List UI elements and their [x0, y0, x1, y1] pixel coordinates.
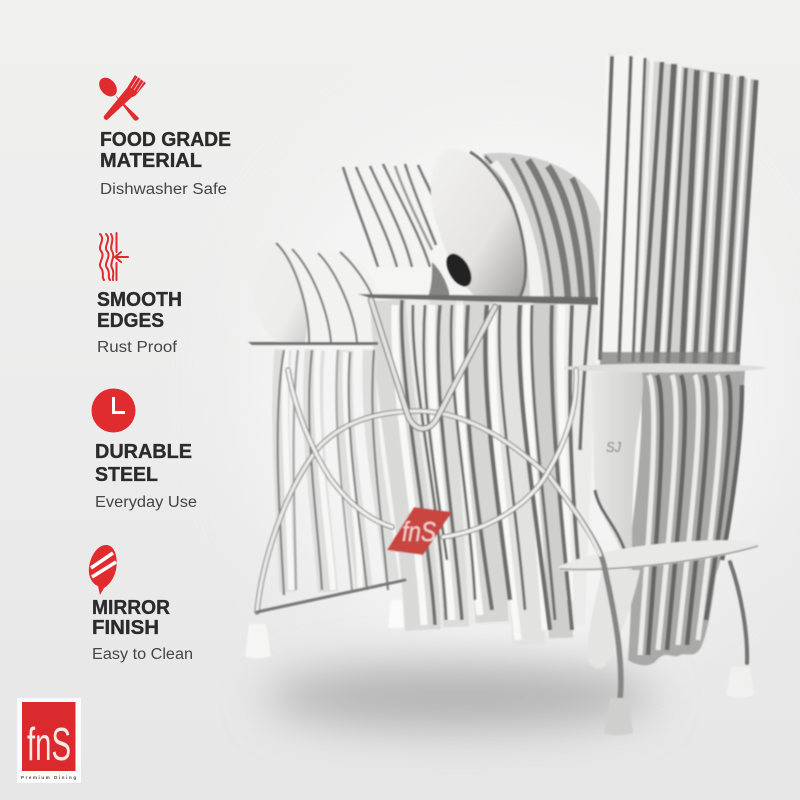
- wire frame: [257, 300, 747, 700]
- icon: wavy edge with arrow: [100, 233, 128, 280]
- subtext: Rust Proof: [97, 339, 178, 356]
- forks: [343, 164, 452, 297]
- heading: FINISH: [92, 617, 159, 639]
- icon: clock: [92, 388, 136, 432]
- subtext: Everyday Use: [95, 494, 197, 511]
- feature: mirror finish: [89, 545, 193, 663]
- heading: MIRROR: [92, 597, 171, 619]
- logo tagline: Premium Dining: [21, 775, 76, 780]
- right upper plate: [564, 364, 766, 372]
- heading: [97, 289, 182, 332]
- top left plate: [248, 342, 378, 345]
- left spoon handles: [278, 350, 392, 595]
- heading: STEEL: [95, 464, 158, 486]
- feature: durable steel: [92, 388, 197, 511]
- subtext: Easy to Clean: [92, 646, 193, 663]
- knife engraving: SJ: [606, 439, 621, 456]
- subtext: Dishwasher Safe: [100, 181, 227, 198]
- icon: spoon and fork: [96, 74, 146, 121]
- rubber feet: [245, 600, 754, 735]
- feature: smooth edges: [97, 233, 182, 356]
- central handles: [380, 300, 598, 645]
- brand logo: [17, 698, 81, 783]
- tag logo: fnS: [402, 516, 436, 547]
- right serrated knives: [628, 370, 745, 665]
- heading: FOOD GRADE: [100, 129, 231, 151]
- front dinner knife: [587, 372, 643, 668]
- knife handles block: [597, 53, 757, 366]
- logo letters: fnS: [27, 718, 71, 770]
- heading: [100, 129, 231, 172]
- heading: MATERIAL: [100, 150, 202, 172]
- heading: [92, 597, 171, 639]
- product photo: cutlery stand: [245, 53, 766, 735]
- red brand tag: [387, 507, 452, 555]
- floor shadow: [265, 665, 655, 729]
- top centre plate: [358, 294, 598, 305]
- heading: EDGES: [97, 310, 164, 332]
- heading: DURABLE: [95, 441, 192, 463]
- left spoons: [251, 242, 378, 342]
- right lower plate: [558, 540, 761, 571]
- heading: SMOOTH: [97, 289, 182, 311]
- icon: spoon bowl: [89, 545, 117, 595]
- back spoons behind big spoon: [483, 153, 601, 297]
- big spoon: [431, 148, 526, 297]
- soft halo behind rack: [250, 110, 770, 670]
- heading: [95, 441, 192, 486]
- feature: food grade material: [96, 74, 231, 198]
